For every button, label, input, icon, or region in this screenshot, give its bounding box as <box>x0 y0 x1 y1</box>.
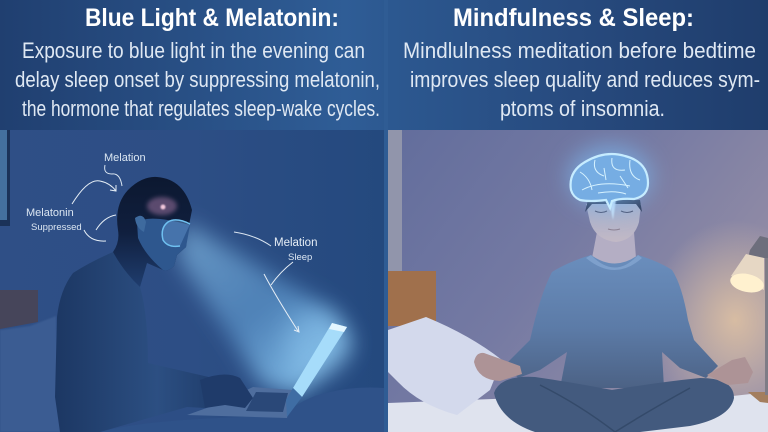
label: Sleep: Sleep <box>288 252 312 263</box>
headboard <box>0 290 38 329</box>
lamp <box>729 236 768 395</box>
label: Melation (top): Melation <box>104 152 146 164</box>
lamp wall glow <box>666 231 765 396</box>
door frame <box>388 130 402 272</box>
headboard <box>388 271 436 326</box>
brain sparkle <box>147 197 177 215</box>
arrow: curve to head <box>72 181 116 204</box>
pillow <box>388 317 502 415</box>
label: Melatonin: Melatonin <box>26 207 74 219</box>
person: head <box>113 177 192 287</box>
laptop glow <box>284 311 352 379</box>
text block: mindfulness explanation: ptoms of insomnia. <box>500 96 665 121</box>
panel: blue light scene <box>0 130 384 432</box>
text block: mindfulness explanation <box>403 38 760 121</box>
label: Melation (right): Melation <box>274 237 317 249</box>
person: right hand <box>707 357 753 385</box>
arrows: suppressed curves <box>84 215 116 241</box>
text block: blue light explanation <box>15 38 380 121</box>
glowing brain <box>568 145 652 209</box>
light beam <box>178 222 350 395</box>
header band <box>0 0 768 130</box>
person: head <box>585 200 642 242</box>
person: neck <box>592 232 636 265</box>
text block: blue light explanation: the hormone that regulates sleep-wake cycles. <box>22 96 380 121</box>
text block: blue light explanation: Exposure to blue light in the evening can <box>22 38 365 63</box>
person: shirt <box>506 255 718 388</box>
nightstand <box>748 392 768 403</box>
arrow: sleep to laptop <box>264 262 299 332</box>
heading: Blue Light & Melatonin: Blue Light & Melatonin: <box>85 4 339 32</box>
pillow <box>0 316 60 432</box>
laptop <box>187 323 347 418</box>
label: Suppressed: Suppressed <box>31 222 82 233</box>
eye mask outline <box>162 220 190 246</box>
text block: blue light explanation: delay sleep onset by suppressing melatonin, <box>15 67 380 92</box>
hand on keyboard <box>200 374 253 408</box>
bed <box>388 392 768 432</box>
person: left hand <box>474 353 522 381</box>
person: torso and arm <box>55 252 225 432</box>
person: legs <box>494 377 734 432</box>
heading: Mindfulness & Sleep: Mindfulness & Sleep: <box>453 4 694 32</box>
picture frame <box>0 130 10 226</box>
arrow: top squiggle <box>105 165 122 186</box>
panel: mindfulness scene <box>388 130 768 432</box>
bed sheet <box>288 388 384 432</box>
arrow: to label <box>234 232 271 246</box>
